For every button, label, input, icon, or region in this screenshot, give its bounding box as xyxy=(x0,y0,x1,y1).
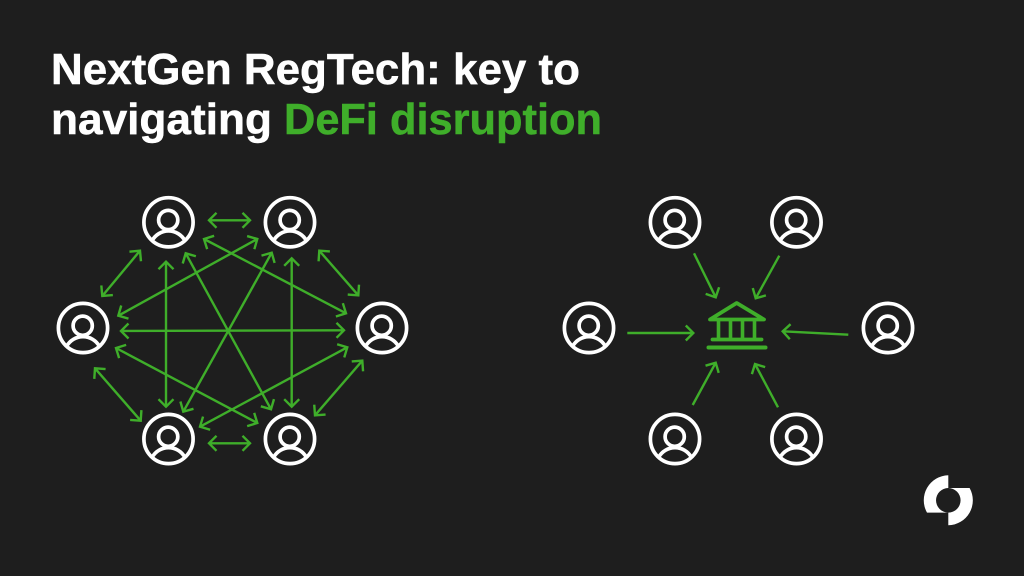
users: decentralized peers xyxy=(58,198,407,464)
arrows pointing to bank xyxy=(627,253,848,407)
title: DeFi disruption xyxy=(284,95,602,144)
users: bank customers xyxy=(564,198,913,464)
title xyxy=(51,45,602,144)
decentralized network diagram xyxy=(58,198,407,464)
title: navigating xyxy=(51,95,272,144)
icon: bank xyxy=(708,303,766,348)
centralized bank diagram xyxy=(564,198,913,464)
logo xyxy=(924,475,973,525)
title: NextGen RegTech: key to xyxy=(51,45,580,94)
peer-to-peer double arrows xyxy=(95,220,362,443)
